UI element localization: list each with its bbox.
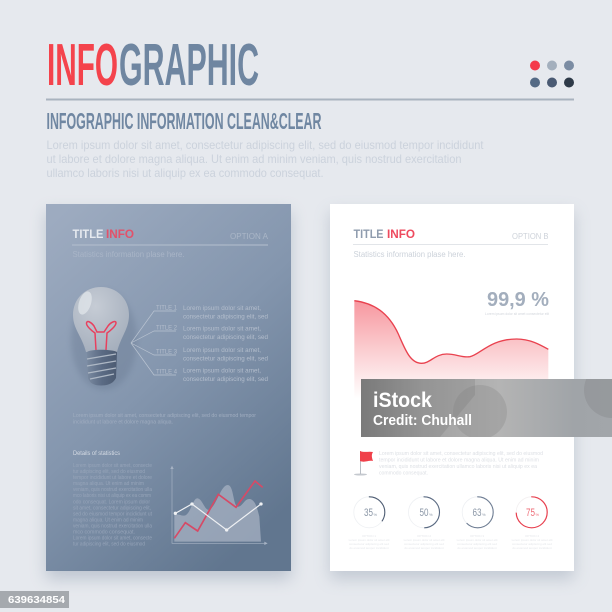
panel A heading: OPTION A: [230, 231, 268, 241]
title: GRAPHIC: [119, 32, 259, 98]
donut captions: Lorem ipsum dolor sit amet elit: [457, 538, 498, 542]
donut: 75%: 75: [526, 507, 535, 519]
bulb callout list: TITLE 2: [156, 324, 177, 332]
bulb callout list: Lorem ipsum dolor sit amet,: [183, 326, 261, 332]
details text column: sed do eiusmod tempor incididunt ut: [73, 512, 152, 518]
details text column: Lorem ipsum dolor sit amet, consecte: [73, 536, 152, 542]
donut captions: consectetur adipiscing elit sed: [349, 542, 389, 546]
watermark credit: Credit: Chuhall: [373, 413, 472, 429]
donut captions: OPTION 2: [417, 534, 431, 538]
donut: 63%: [462, 497, 493, 528]
details text column: [73, 463, 153, 548]
bulb callout list: TITLE 4: [156, 368, 177, 376]
panel: option A: [46, 204, 291, 571]
donut captions: Lorem ipsum dolor sit amet elit: [404, 538, 445, 542]
icon: flag: [354, 451, 373, 476]
details text column: magna aliqua. Ut enim ad minim: [73, 481, 144, 487]
panel B heading: Statistics information plase here.: [354, 250, 466, 259]
details text column: veniam, quis nostrud exercitation ulla: [73, 487, 153, 493]
details text column: magna aliqua. Ut enim ad minim: [73, 518, 143, 524]
bulb callout list: Lorem ipsum dolor sit amet,: [183, 305, 261, 312]
donut captions: do eiusmod tempor incididunt: [457, 546, 497, 550]
donut captions: do eiusmod tempor incididunt: [512, 546, 552, 550]
icon: light bulb: [71, 287, 137, 390]
details text column: tur adipiscing elit, sed do eiusmod: [73, 469, 145, 475]
panel B heading: [353, 229, 549, 259]
flag text: Lorem ipsum dolor sit amet, consectetur adipiscing elit, sed do eiusmod: [379, 451, 543, 457]
donut captions: OPTION 4: [525, 534, 539, 538]
details text column: mco laboris nisi ut aliquip ex ea comm: [73, 493, 151, 499]
details text column: Lorem ipsum dolor sit amet, consecte: [73, 463, 152, 469]
donut: 35%: %: [374, 512, 378, 517]
donut captions: OPTION 1: [362, 534, 376, 538]
donut: 50%: %: [429, 512, 433, 517]
donut captions: [349, 534, 553, 550]
bulb callout list: Lorem ipsum dolor sit amet,: [183, 368, 261, 374]
donut captions: do eiusmod tempor incididunt: [349, 546, 389, 550]
bulb callout list: consectetur adipiscing elit, sed: [183, 334, 268, 341]
intro text: ullamco laboris nisi ut aliquip ex ea commodo consequat.: [46, 166, 324, 180]
flag text: veniam, quis nostrud exercitation ullamco laboris nisi ut aliquip ex ea: [379, 464, 538, 470]
connector lines: [131, 311, 176, 375]
bulb callout list: [156, 304, 268, 383]
bulb callout list: consectetur adipiscing elit, sed: [183, 356, 268, 362]
donut captions: consectetur adipiscing elit sed: [512, 542, 552, 546]
donut: 35%: 35: [364, 507, 373, 519]
flag text: tempor incididunt ut labore et dolore magna aliqua. Ut enim ad minim: [379, 458, 539, 464]
panel A heading: [72, 229, 268, 259]
image id tag: [0, 591, 69, 608]
panel A heading: INFO: [106, 229, 134, 241]
panel A heading: TITLE: [72, 229, 104, 241]
intro text: ut labore et dolore magna aliqua. Ut enim ad minim veniam, quis nostrud exercitation: [46, 152, 462, 166]
intro text: Lorem ipsum dolor sit amet, consectetur adipiscing elit, sed do eiusmod tempor incididunt: [46, 138, 484, 152]
donut captions: Lorem ipsum dolor sit amet elit: [512, 538, 553, 542]
bulb callout list: consectetur adipiscing elit, sed: [183, 314, 268, 320]
details text column: mco commodo consequat.: [73, 530, 135, 536]
donut captions: do eiusmod tempor incididunt: [404, 546, 444, 550]
area chart: [354, 301, 548, 404]
donut: 63%: %: [482, 512, 486, 517]
bulb callout list: TITLE 1: [156, 304, 177, 312]
donut: 75%: %: [536, 512, 540, 517]
donut: 75%: [516, 497, 547, 528]
bulb callout list: Lorem ipsum dolor sit amet,: [183, 347, 261, 354]
subtitle: INFOGRAPHIC INFORMATION CLEAN&CLEAR: [46, 108, 322, 134]
details text column: tur adipiscing elit, sed do eiusmod: [73, 542, 145, 548]
bulb callout list: consectetur adipiscing elit, sed: [183, 376, 268, 383]
details text column: odo consequat. Lorem ipsum dolor: [73, 500, 150, 506]
details text column: tempor incididunt ut labore et dolore: [73, 475, 152, 481]
panel B heading: OPTION B: [512, 231, 549, 241]
donut: 35%: [354, 497, 385, 528]
donut: 63%: 63: [472, 507, 482, 519]
flag text: [379, 451, 543, 476]
panel A paragraph: incididunt ut labore et dolore magna aliqua.: [73, 420, 173, 426]
big percentage: 99,9 %: [487, 289, 549, 311]
donut: 50%: 50: [420, 507, 428, 519]
donut captions: OPTION 3: [470, 534, 484, 538]
watermark logo: iStock: [373, 389, 432, 412]
title: [47, 32, 259, 98]
panel A heading: Statistics information plase here.: [72, 250, 184, 259]
donut captions: consectetur adipiscing elit sed: [457, 542, 497, 546]
details text column: veniam, quis nostrud exercitation ulla: [73, 524, 153, 530]
donut: 50%: [408, 497, 440, 528]
donut captions: consectetur adipiscing elit sed: [404, 542, 444, 546]
panel A paragraph: [73, 413, 256, 426]
details text column: sit amet, consectetur adipiscing elit,: [73, 506, 151, 512]
intro text: [46, 138, 484, 180]
bulb callout list: TITLE 3: [156, 348, 177, 356]
flag text: commodo consequat.: [379, 470, 428, 476]
watermark band: [361, 379, 612, 437]
panel B heading: INFO: [387, 229, 415, 241]
panel A paragraph: Lorem ipsum dolor sit amet, consectetur adipiscing elit, sed do eiusmod tempor: [73, 413, 256, 419]
panel: option B: [330, 204, 574, 571]
statistics chart: [170, 466, 268, 545]
details heading: Details of statistics: [73, 450, 121, 457]
colour palette dots: [530, 60, 574, 88]
panel B heading: TITLE: [354, 229, 384, 241]
image id tag: 639634854: [8, 595, 65, 606]
percentage caption: Lorem ipsum dolor sit amet consectetur elit: [485, 312, 549, 316]
title: INFO: [47, 32, 118, 98]
donut captions: Lorem ipsum dolor sit amet elit: [349, 538, 390, 542]
